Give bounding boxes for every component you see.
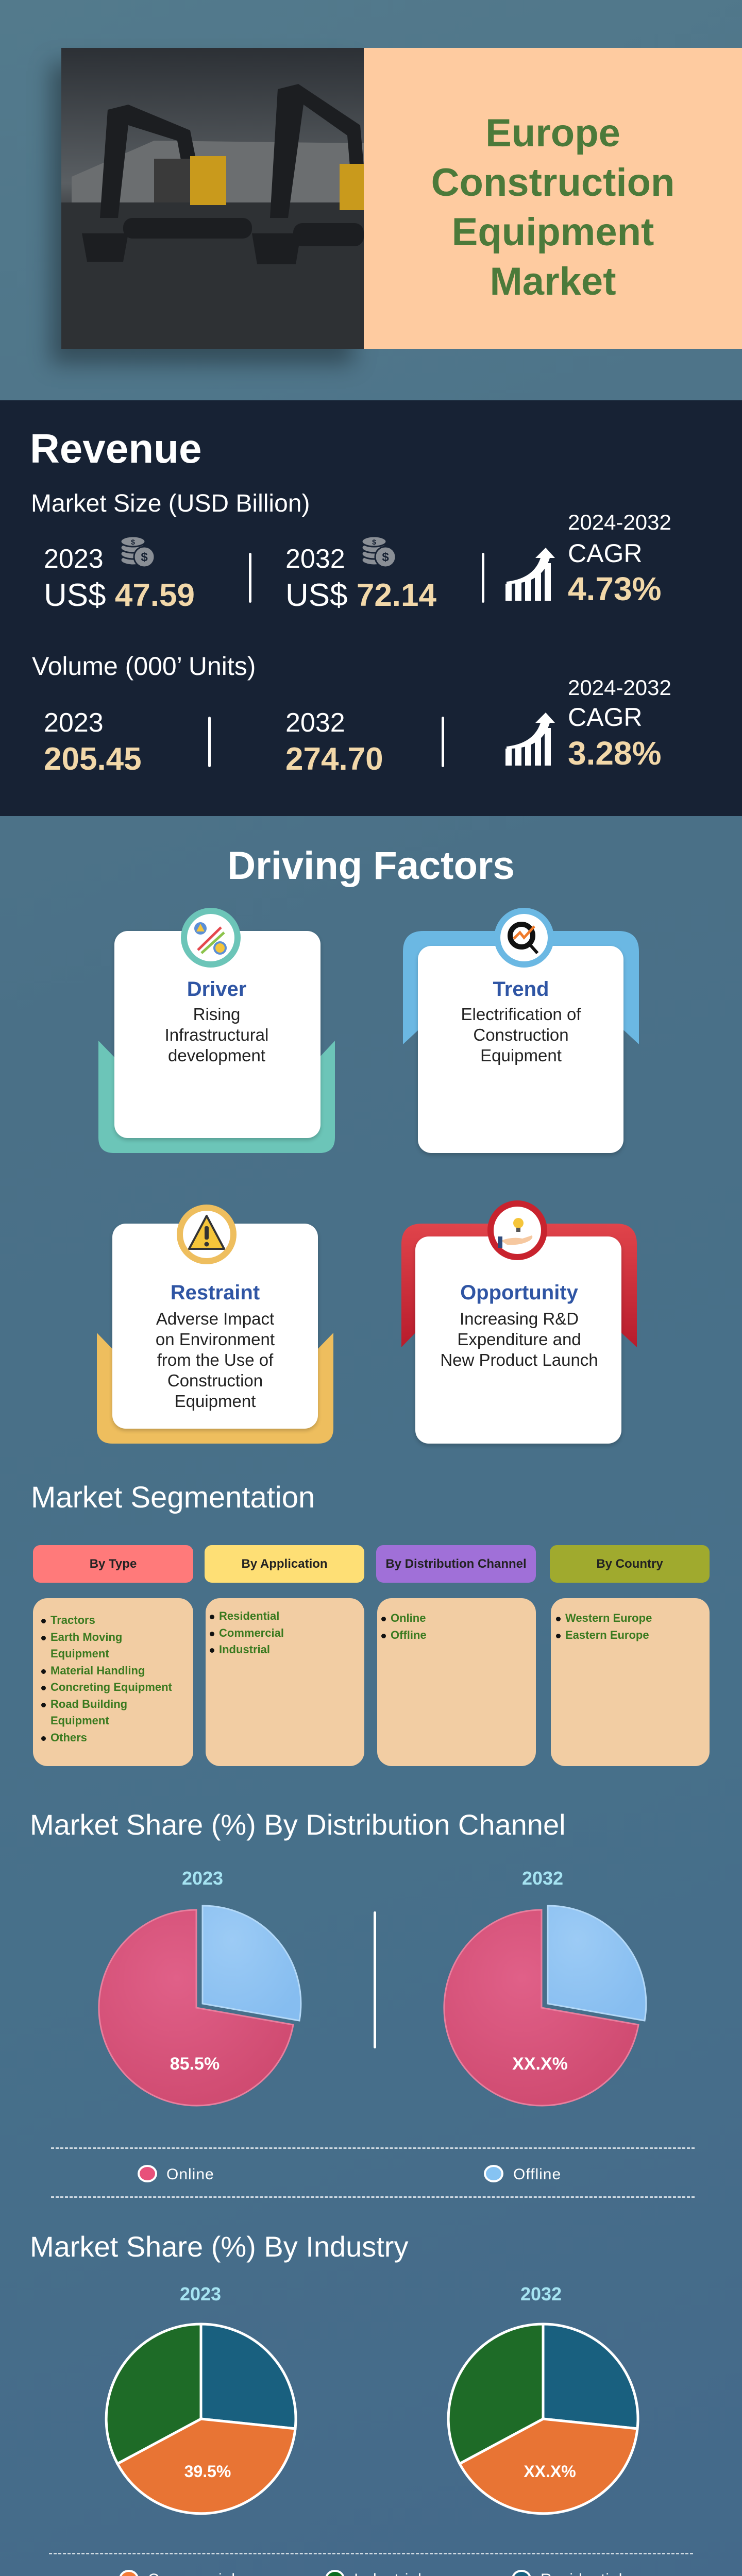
segmentation: by type <box>33 1545 193 1766</box>
icon: growth chart <box>505 713 555 766</box>
cagr revenue <box>568 510 671 607</box>
market segmentation heading: Market Segmentation <box>31 1481 315 1514</box>
revenue heading: Revenue <box>30 426 201 471</box>
icon: coins 2023: $ <box>141 550 148 564</box>
icon: idea hand <box>487 1200 547 1260</box>
year 2023: 2023 <box>182 1868 223 1889</box>
header: by application: By Application <box>241 1557 328 1570</box>
icon: coins 2032 <box>363 537 395 567</box>
opportunity text <box>440 1309 598 1369</box>
pie chart: distribution 2032 <box>443 1905 647 2106</box>
pie chart: distribution 2023 <box>98 1905 302 2106</box>
trend text: Electrification of <box>461 1005 581 1024</box>
cagr volume: 3.28% <box>568 735 661 772</box>
list: channels <box>377 1598 536 1766</box>
icon: growth chart <box>505 548 555 601</box>
header: by application <box>205 1545 364 1583</box>
panel: driver <box>98 908 335 1153</box>
list: applications: Residential <box>219 1609 279 1622</box>
segmentation: by distribution channel <box>376 1545 536 1766</box>
divider <box>482 553 484 603</box>
list: applications <box>206 1598 364 1766</box>
pie chart: distribution 2032: XX.X% <box>512 2054 568 2074</box>
market size label: Market Size (USD Billion) <box>31 490 310 517</box>
icon: driver <box>181 908 241 968</box>
list: types: Earth Moving <box>50 1630 122 1643</box>
cagr revenue: 2024-2032 <box>568 510 671 534</box>
list: types: Others <box>50 1731 87 1743</box>
pie chart: industry 2032 <box>447 2323 639 2515</box>
value 2032 <box>285 544 436 613</box>
pie chart: industry 2023: 39.5% <box>184 2462 231 2481</box>
header: distribution <box>376 1545 536 1583</box>
value 2032: 2032 <box>285 544 345 574</box>
list: types: Equipment <box>50 1714 109 1727</box>
trend text: Construction <box>473 1025 569 1044</box>
trend text <box>461 1005 581 1065</box>
value 2023: US$ 47.59 <box>44 578 195 613</box>
cagr volume: CAGR <box>568 703 642 732</box>
value 2023: 2023 <box>44 544 104 574</box>
header: country: By Country <box>596 1557 663 1570</box>
title: Europe <box>485 111 620 155</box>
header: country <box>550 1545 710 1583</box>
panel: opportunity <box>401 1200 637 1447</box>
list: types: Tractors <box>50 1614 95 1626</box>
photo: excavators <box>61 48 364 349</box>
icon: warning <box>177 1205 237 1264</box>
title: Construction <box>431 161 674 205</box>
volume 2032: 2032 <box>285 708 345 738</box>
divider <box>442 717 444 767</box>
list: channels: Online <box>391 1612 426 1624</box>
opportunity text: Expenditure and <box>457 1330 581 1349</box>
restraint title: Restraint <box>171 1281 260 1304</box>
value 2023 <box>44 544 195 613</box>
legend: industry <box>49 2553 693 2576</box>
trend title: Trend <box>493 978 549 1001</box>
opportunity text: Increasing R&D <box>460 1309 579 1328</box>
list: applications: Commercial <box>219 1626 284 1639</box>
list: types <box>33 1598 193 1766</box>
restraint text: Adverse Impact <box>156 1309 274 1328</box>
year 2032: 2032 <box>520 2283 562 2304</box>
icon: coins 2032: $ <box>372 538 376 546</box>
pie chart: distribution 2023: 85.5% <box>170 2054 220 2074</box>
list: countries: Eastern Europe <box>565 1628 649 1641</box>
icon: coins 2023 <box>122 537 154 567</box>
title <box>431 111 674 303</box>
icon: coins 2023: $ <box>131 538 135 546</box>
volume 2023: 205.45 <box>44 741 142 777</box>
trend text: Equipment <box>480 1046 562 1065</box>
driver text: development <box>168 1046 265 1065</box>
list: countries: Western Europe <box>565 1612 652 1624</box>
restraint text: on Environment <box>156 1330 275 1349</box>
opportunity title: Opportunity <box>460 1281 578 1304</box>
title block <box>364 48 742 349</box>
title: Equipment <box>452 210 654 254</box>
volume label: Volume (000’ Units) <box>32 652 256 681</box>
divider <box>249 553 251 603</box>
legend: distribution <box>51 2147 695 2198</box>
volume 2023: 2023 <box>44 708 104 738</box>
list: channels: Offline <box>391 1628 427 1641</box>
industry share heading: Market Share (%) By Industry <box>30 2230 408 2263</box>
driver title: Driver <box>187 978 246 1001</box>
restraint text: Equipment <box>175 1392 256 1411</box>
driver text: Infrastructural <box>165 1025 268 1044</box>
legend: distribution: Online <box>166 2166 214 2183</box>
title: Market <box>490 260 616 303</box>
cagr revenue: 4.73% <box>568 570 661 607</box>
pie chart: industry 2023 <box>105 2323 297 2515</box>
segmentation: by country <box>550 1545 710 1766</box>
panel: trend <box>403 908 639 1156</box>
divider <box>374 1911 376 2048</box>
segmentation: by application <box>205 1545 364 1766</box>
list: types: Equipment <box>50 1647 109 1660</box>
icon: coins 2032: $ <box>382 550 389 564</box>
list: types: Concreting Equipment <box>50 1681 172 1693</box>
icon: trend <box>495 908 553 968</box>
volume 2023 <box>44 708 142 777</box>
restraint text: Construction <box>167 1371 263 1390</box>
header banner <box>41 48 742 375</box>
restraint text: from the Use of <box>157 1350 273 1369</box>
list: types: Road Building <box>50 1697 127 1710</box>
volume 2032 <box>285 708 383 777</box>
pie chart: industry 2032: XX.X% <box>524 2462 576 2481</box>
cagr revenue: CAGR <box>568 539 642 568</box>
panel: restraint <box>97 1205 333 1444</box>
legend: distribution: Offline <box>513 2166 561 2183</box>
driver text: Rising <box>193 1005 240 1024</box>
cagr volume <box>568 675 671 772</box>
opportunity text: New Product Launch <box>440 1350 598 1369</box>
list: types: Material Handling <box>50 1664 145 1676</box>
panel: revenue <box>0 400 742 816</box>
value 2032: US$ 72.14 <box>285 578 436 613</box>
distribution share heading: Market Share (%) By Distribution Channel <box>30 1808 566 1841</box>
list: applications: Industrial <box>219 1643 270 1656</box>
list: countries <box>551 1598 710 1766</box>
driving factors heading: Driving Factors <box>227 844 515 888</box>
header: by type <box>33 1545 193 1583</box>
volume 2032: 274.70 <box>285 741 383 777</box>
header: by type: By Type <box>90 1557 137 1570</box>
header: distribution: By Distribution Channel <box>385 1557 527 1570</box>
cagr volume: 2024-2032 <box>568 675 671 700</box>
divider <box>208 717 211 767</box>
driver text <box>165 1005 268 1065</box>
restraint text <box>156 1309 275 1411</box>
year 2032: 2032 <box>522 1868 563 1889</box>
year 2023: 2023 <box>180 2283 221 2304</box>
